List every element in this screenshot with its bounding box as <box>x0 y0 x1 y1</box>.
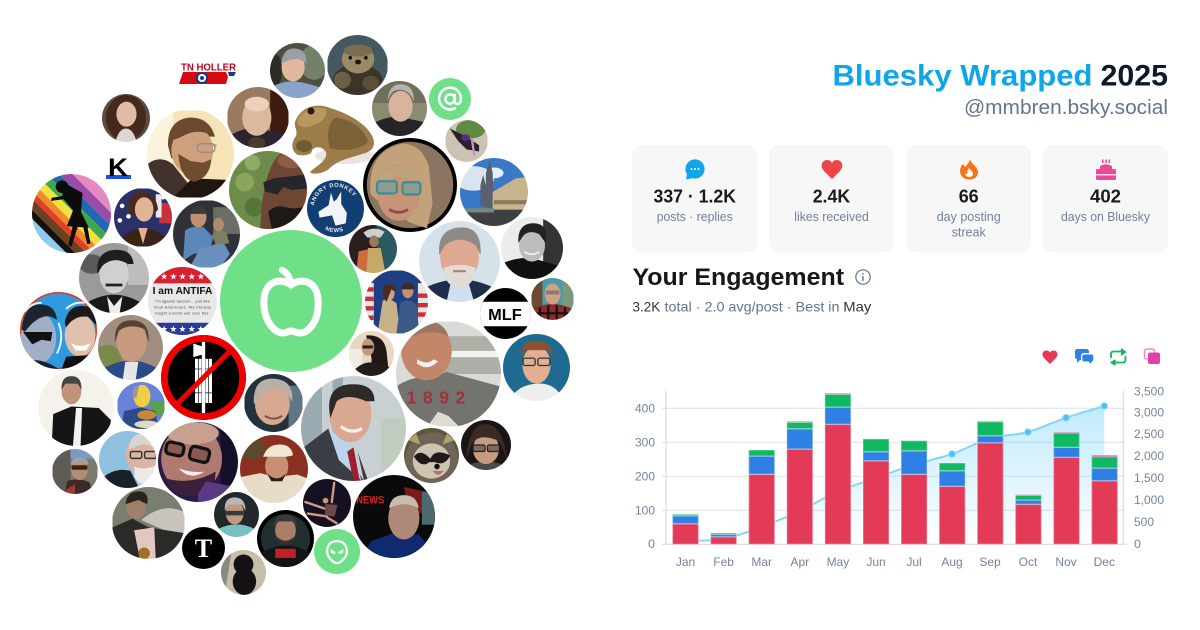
avatar: older man with NEWS sign <box>353 475 435 558</box>
avatar: sea otter <box>328 35 388 95</box>
right axis labels <box>1134 384 1164 551</box>
heading: Your Engagement: Your Engagement <box>632 264 844 291</box>
avatar: blonde woman in teal glasses, black ring <box>363 138 457 232</box>
right axis labels: 1,000 <box>1134 493 1164 507</box>
bar: Aug <box>939 463 965 544</box>
stat label: streak <box>952 226 986 240</box>
stat label: days on Bluesky <box>1061 210 1151 224</box>
bar: Jun <box>863 439 889 544</box>
month labels: Apr <box>790 555 809 569</box>
icon: at sign badge <box>429 78 471 120</box>
avatar: cartoon principal with burger <box>118 382 164 429</box>
icon: quotes <box>1144 349 1160 364</box>
avatar: grey-haired man in dark jacket <box>372 81 427 136</box>
left axis labels: 100 <box>635 504 655 518</box>
icon: reposts <box>1111 349 1126 365</box>
bar: Sep <box>977 421 1003 544</box>
avatar: smiling man in grey 1892 shirt: 1892 <box>407 387 465 407</box>
avatar: black and white portrait of smiling man <box>501 217 563 279</box>
legend icons <box>1043 349 1160 365</box>
avatar: man with glasses on teal <box>503 334 570 401</box>
badge: I am ANTIFA: I am ANTIFA <box>153 286 212 297</box>
avatar: raccoon <box>404 428 459 483</box>
engagement summary: total · 2.0 avg/post · Best in <box>664 299 840 315</box>
right axis labels: 500 <box>1134 515 1154 529</box>
bar: Jan <box>672 514 698 544</box>
avatar: woman with dark hair and glasses <box>349 331 394 376</box>
bar: Apr <box>787 421 813 544</box>
avatar: man in orange sunglasses <box>52 449 98 494</box>
avatar: black curly dog <box>221 550 266 595</box>
stat label <box>937 210 1001 240</box>
avatar: bearded man in glasses <box>147 110 234 198</box>
badge: I am ANTIFA: ★★★★★ <box>160 325 205 334</box>
month labels <box>676 555 1115 569</box>
avatar: Renaissance painting <box>349 225 397 273</box>
right axis labels: 3,000 <box>1134 406 1164 420</box>
panel: posts and replies card <box>632 145 757 252</box>
avatar: New Orleans cathedral <box>460 158 528 226</box>
icon: no fasces symbol <box>161 335 246 420</box>
stat value: 66 <box>959 186 979 206</box>
icon: likes <box>1043 350 1057 364</box>
avatar: Angry Donkey News badge <box>307 180 364 237</box>
right axis labels: 1,500 <box>1134 471 1164 485</box>
stat value: 2.4K <box>813 186 850 206</box>
badge: I am ANTIFA <box>148 267 217 335</box>
bar: Jul <box>901 441 927 544</box>
avatar: Angry Donkey News badge: NEWS <box>325 226 343 232</box>
cumulative area <box>686 406 1104 544</box>
avatar: older man in plaid <box>532 278 574 320</box>
avatar: smiling man in grey 1892 shirt <box>396 322 501 426</box>
handle: @mmbren.bsky.social <box>964 96 1168 119</box>
stat label: likes received <box>794 210 869 224</box>
avatar: two men in blue, red ring <box>20 292 97 369</box>
avatar: woman with American flag <box>114 188 172 246</box>
left axis labels: 200 <box>635 470 655 484</box>
right axis labels: 0 <box>1134 537 1141 551</box>
stat label: day posting <box>937 210 1001 224</box>
month labels: Jun <box>866 555 886 569</box>
engagement summary: May <box>843 299 871 315</box>
avatar: older man, grey hair, navy suit <box>419 221 500 302</box>
icon: heart <box>822 160 842 179</box>
right axis labels: 2,000 <box>1134 449 1164 463</box>
title: 2025 <box>1100 60 1168 92</box>
avatar: man in blue shirt in helicopter <box>173 200 240 268</box>
month labels: Mar <box>751 555 772 569</box>
bar: Feb <box>711 533 737 544</box>
avatar: older man with NEWS sign: NEWS <box>356 494 384 506</box>
avatar: man with glasses and dark hair <box>461 420 511 470</box>
month labels: Sep <box>979 555 1001 569</box>
cumulative line <box>686 406 1104 541</box>
badge: I am ANTIFA: I'm against fascism... just like <box>155 299 210 303</box>
avatar: white-bearded man on blue <box>99 431 156 488</box>
month labels: Jan <box>676 555 695 569</box>
avatar: laughing man in black glasses, purple tones <box>158 422 238 502</box>
panel: days on Bluesky card <box>1043 145 1168 252</box>
avatar: toad <box>292 106 374 174</box>
avatar: couple before flags <box>365 270 428 334</box>
bar: Dec <box>1092 455 1118 544</box>
month labels: Jul <box>906 555 922 569</box>
bar: Nov <box>1054 432 1080 544</box>
month labels: Feb <box>713 555 734 569</box>
avatar: man in navy jacket <box>98 315 163 380</box>
badge: I am ANTIFA: ★★★★★ <box>160 272 205 281</box>
avatar: man reclining on sofa <box>112 487 184 559</box>
logo: newspaper T <box>182 527 225 569</box>
avatar: silver-haired man in blue check shirt <box>270 43 325 98</box>
icon: chat bubble <box>685 159 705 180</box>
bar: Oct <box>1015 494 1041 544</box>
logo: TN Holler: TN HOLLER <box>181 62 236 74</box>
month labels: Dec <box>1094 555 1115 569</box>
avatar: black and white old portrait <box>79 243 149 313</box>
avatar: man in black blazer on white <box>38 370 114 446</box>
month labels: Nov <box>1055 555 1077 569</box>
right axis labels: 2,500 <box>1134 427 1164 441</box>
logo: MLF <box>480 288 531 339</box>
logo: MLF: MLF <box>488 307 522 324</box>
badge: I am ANTIFA: fought a world war over this. <box>155 312 210 316</box>
chart: monthly engagement stacked bars with cumulative line <box>635 384 1164 569</box>
badge: I am ANTIFA: most Americans. We literally <box>154 305 211 309</box>
bar: Mar <box>749 450 775 544</box>
icon: flame <box>960 159 978 180</box>
left axis labels: 400 <box>635 402 655 416</box>
icon: replies <box>1075 349 1093 364</box>
avatar: woman with long brown hair <box>102 94 150 142</box>
panel: streak card <box>906 145 1031 252</box>
avatar: pride stripes with silhouette <box>32 174 111 253</box>
title: Bluesky Wrapped <box>832 60 1092 92</box>
avatar: bald man on video call <box>228 87 288 148</box>
month labels: Aug <box>941 555 963 569</box>
stat value: 337 · 1.2K <box>654 186 736 206</box>
avatar: Angry Donkey News badge: ANGRY DONKEY <box>310 182 357 206</box>
left axis labels: 0 <box>648 537 655 551</box>
avatar: man with grey hair and glasses <box>214 492 259 537</box>
line markers <box>949 403 1108 457</box>
avatar: man in sunglasses among foliage <box>229 151 307 229</box>
grid lines and axes <box>662 391 1127 544</box>
right axis labels: 3,500 <box>1134 384 1164 398</box>
avatar: man in white turban <box>240 435 308 503</box>
month labels: May <box>827 555 849 569</box>
icon: alien badge <box>314 529 360 574</box>
avatar: dog on lead <box>446 120 488 162</box>
icon: cake <box>1096 160 1116 180</box>
left axis labels <box>635 402 655 551</box>
avatar: dancer <box>303 479 351 527</box>
avatar: bearded man in black ring <box>257 510 314 567</box>
engagement summary: 3.2K <box>632 299 661 315</box>
stat label: posts · replies <box>657 210 733 224</box>
bar: May <box>825 393 851 544</box>
avatar: smiling man in grey jacket, red tie <box>301 376 406 481</box>
icon: info <box>856 270 870 284</box>
logo: newspaper T: T <box>195 534 212 563</box>
panel: avatar cloud <box>20 35 574 595</box>
left axis labels: 300 <box>635 436 655 450</box>
avatar: apple badge (large) <box>220 230 362 372</box>
avatar: smiling older man <box>244 374 302 432</box>
logo: TN Holler <box>179 62 236 84</box>
stat value: 402 <box>1090 186 1121 206</box>
panel: likes card <box>769 145 894 252</box>
month labels: Oct <box>1019 555 1038 569</box>
